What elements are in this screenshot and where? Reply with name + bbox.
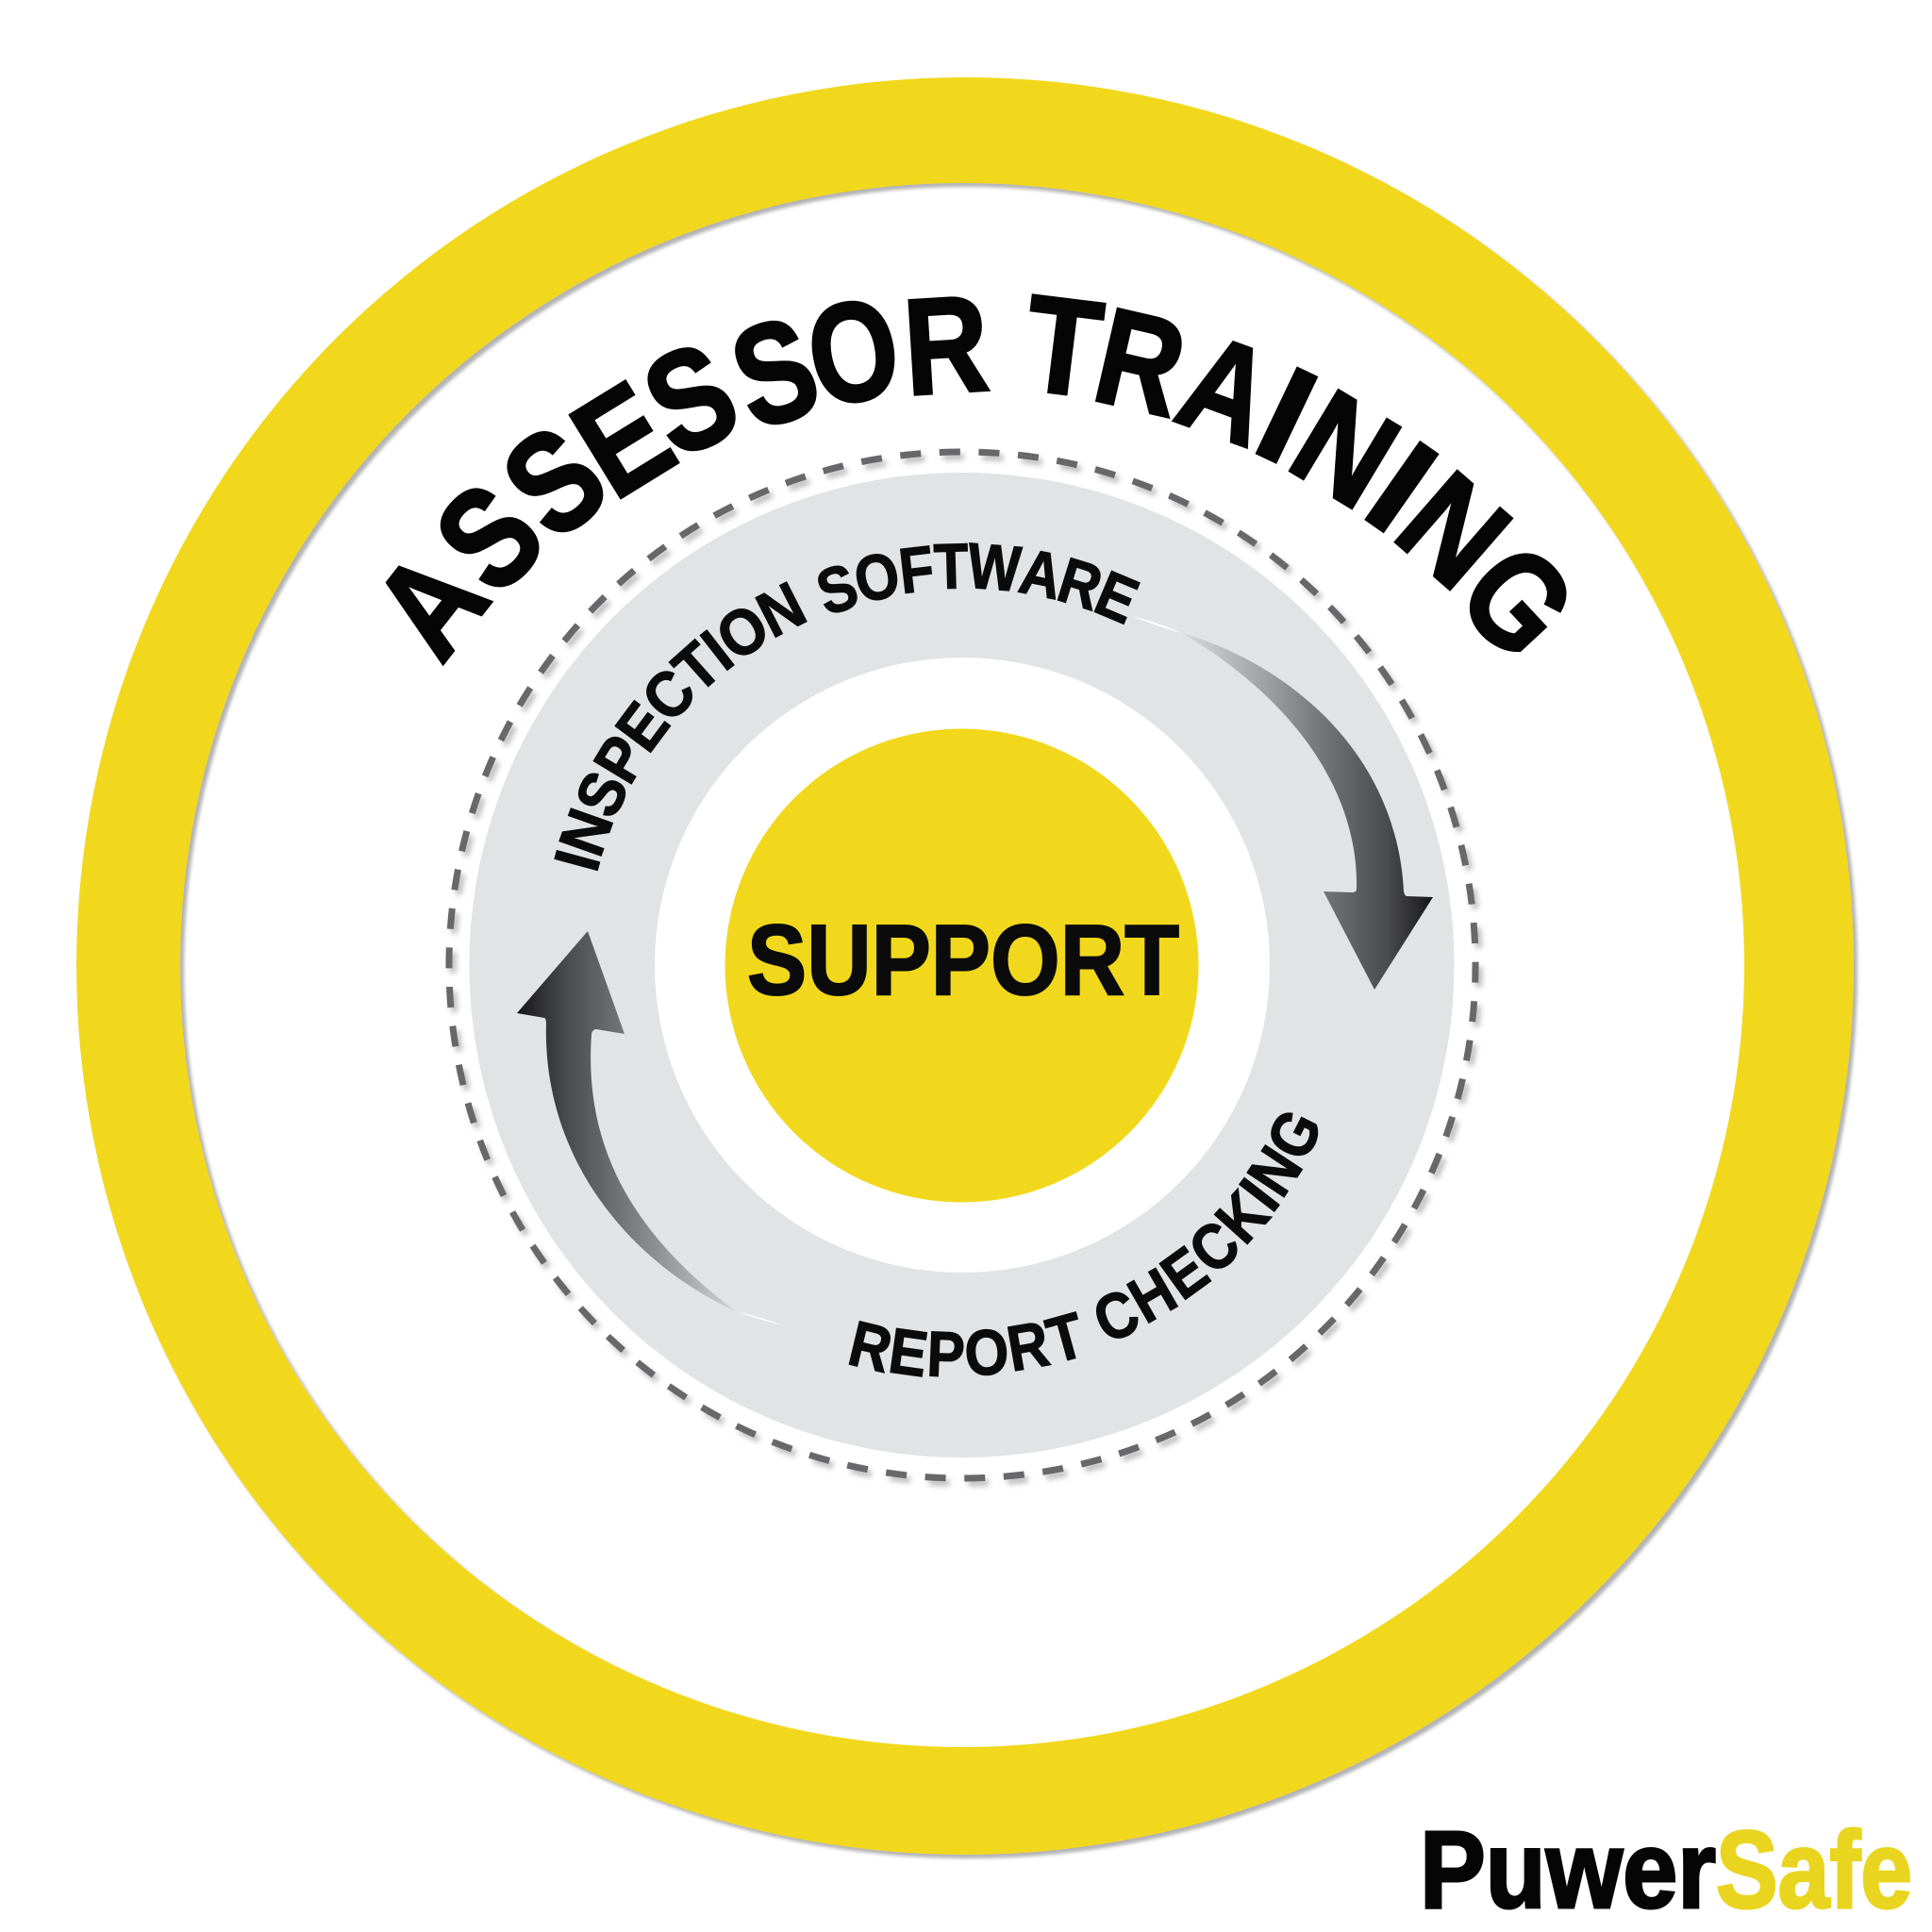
label: report checking: E: [1148, 1233, 1221, 1313]
label: report checking: P: [925, 1318, 966, 1391]
title: assessor training: T: [1017, 266, 1109, 427]
label: inspection software: N: [746, 568, 816, 651]
white inner ring: [655, 658, 1270, 1273]
title: assessor training: S: [714, 286, 836, 460]
title: assessor training: O: [795, 266, 911, 438]
logo: PuwerSafe: [1420, 1808, 1912, 1931]
label: report checking: I: [1225, 1166, 1292, 1223]
title: assessor training: N: [1370, 443, 1537, 617]
title: assessor training: I: [1236, 337, 1338, 492]
arrow: clockwise down right: [1132, 616, 1433, 990]
title: assessor training: G: [1431, 515, 1605, 686]
label: report checking: G: [1252, 1098, 1337, 1170]
label: report checking: H: [1117, 1254, 1188, 1337]
label: inspection software: E: [1086, 557, 1148, 638]
label: inspection software: [541, 529, 1148, 877]
heading: support: SUPPORT: [747, 905, 1179, 1016]
grey process ring: [470, 473, 1455, 1457]
title: assessor training: S: [406, 454, 574, 622]
label: inspection software: T: [933, 529, 970, 603]
label: report checking: [842, 1098, 1337, 1391]
title: assessor training: E: [547, 352, 698, 528]
title: assessor training: S: [622, 311, 760, 488]
label: report checking: C: [1083, 1274, 1149, 1357]
label: inspection software: C: [628, 655, 709, 735]
logo word: Puwer: Puwer: [1420, 1808, 1716, 1931]
title: assessor training: R: [1082, 278, 1199, 446]
label: inspection software: A: [1014, 535, 1068, 613]
label: report checking: O: [962, 1315, 1010, 1390]
label: report checking: E: [885, 1314, 932, 1391]
label: inspection software: I: [689, 617, 745, 684]
title: assessor training: R: [900, 266, 992, 425]
label: report checking: K: [1202, 1177, 1282, 1257]
label: report checking: C: [1175, 1207, 1254, 1288]
label: report checking: R: [1002, 1307, 1055, 1385]
label: inspection software: T: [659, 628, 734, 706]
label: inspection software: P: [579, 724, 661, 794]
label: inspection software: W: [965, 529, 1024, 606]
label: report checking: T: [1040, 1298, 1091, 1377]
arrow: clockwise up left: [517, 931, 783, 1325]
title: assessor training: A: [344, 524, 517, 684]
label: inspection software: O: [848, 538, 907, 617]
label: inspection software: S: [808, 549, 866, 629]
label: inspection software: E: [602, 690, 683, 764]
label: inspection software: O: [704, 590, 781, 675]
label: inspection software: S: [561, 760, 642, 827]
title: assessor training: N: [1268, 361, 1423, 538]
title: assessor training: [344, 266, 1605, 686]
label: report checking: R: [842, 1307, 899, 1387]
label: inspection software: R: [1050, 543, 1110, 625]
label: inspection software: F: [895, 532, 938, 608]
title: assessor training: A: [1160, 303, 1292, 476]
dashed orbit ring: [449, 452, 1475, 1478]
label: report checking: N: [1233, 1134, 1316, 1208]
label: inspection software: I: [541, 843, 614, 877]
title: assessor training: S: [475, 396, 635, 568]
title: assessor training: I: [1341, 412, 1462, 561]
central yellow circle: [724, 728, 1198, 1202]
label: inspection software: N: [545, 800, 626, 864]
